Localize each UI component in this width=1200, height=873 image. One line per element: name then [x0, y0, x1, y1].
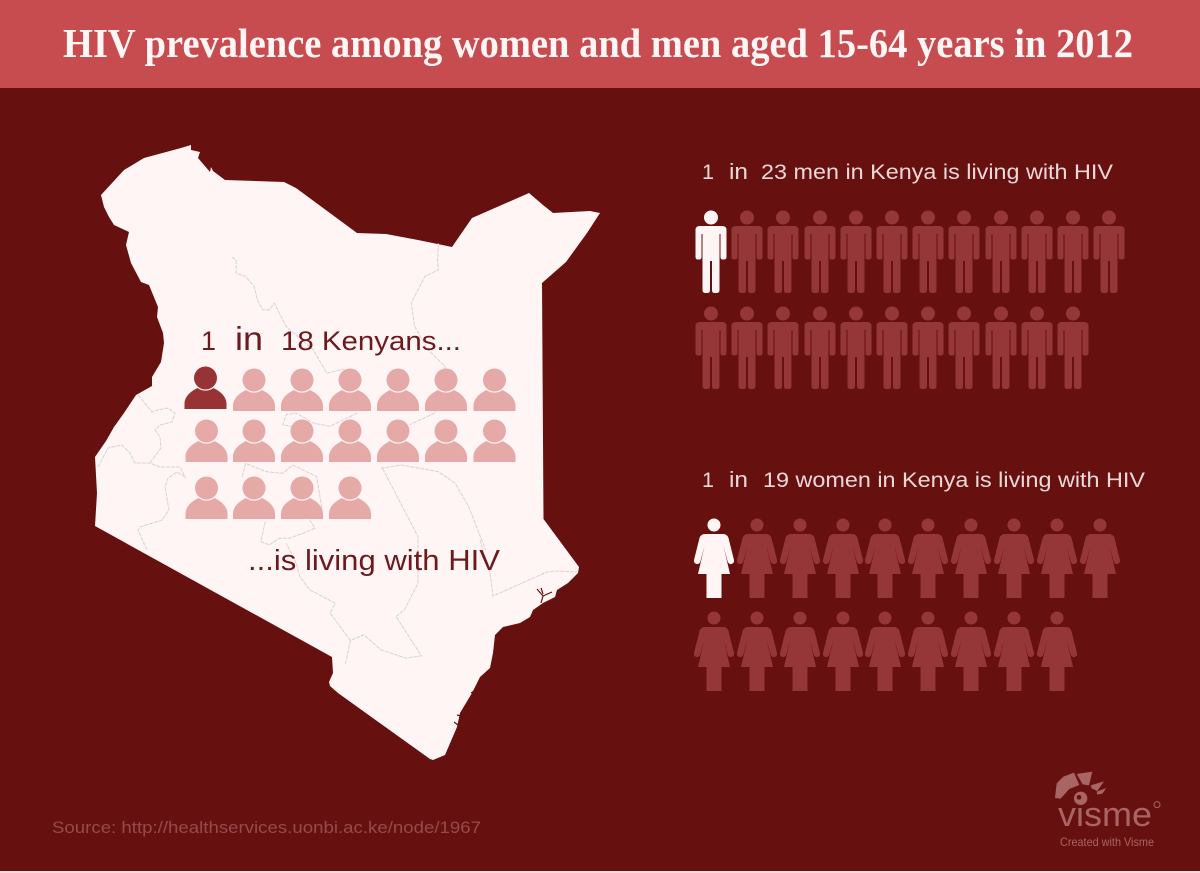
logo: Visme — [1055, 772, 1160, 849]
caption: is living with HIV: ...is living with HIV — [248, 545, 501, 577]
bottom edge — [0, 871, 1200, 873]
heading: men: in — [729, 159, 748, 184]
title banner — [0, 0, 1200, 88]
pictogram: 1 of 23 men — [696, 210, 1124, 389]
map outline — [95, 145, 600, 760]
heading: men: 23 men in Kenya is living with HIV — [761, 161, 1113, 184]
panel: Kenya map — [95, 145, 600, 760]
pictogram: 1 of 19 women — [694, 518, 1120, 691]
title: HIV prevalence among women and men aged 15-64 years in 2012 — [63, 20, 1133, 66]
county borders — [98, 243, 577, 665]
headline: 1 in 18 Kenyans: in — [235, 320, 263, 357]
coastal creeks — [454, 588, 552, 725]
source note: Source: http://healthservices.uonbi.ac.ke/node/1967 — [52, 818, 481, 837]
heading: women: in — [729, 467, 748, 492]
heading: women: 19 women in Kenya is living with HIV — [763, 469, 1145, 492]
headline: 1 in 18 Kenyans — [201, 320, 461, 357]
heading: women: 1 — [702, 469, 714, 492]
headline: 1 in 18 Kenyans: 1 — [201, 326, 216, 356]
pictogram: 1 of 18 Kenyans — [184, 366, 516, 519]
headline: 1 in 18 Kenyans: 18 Kenyans... — [281, 326, 461, 356]
tagline: Created with Visme — [1060, 835, 1154, 849]
heading: men: 1 — [702, 161, 714, 184]
wordmark: visme — [1058, 796, 1152, 834]
icon: fan and eye — [1055, 772, 1160, 808]
